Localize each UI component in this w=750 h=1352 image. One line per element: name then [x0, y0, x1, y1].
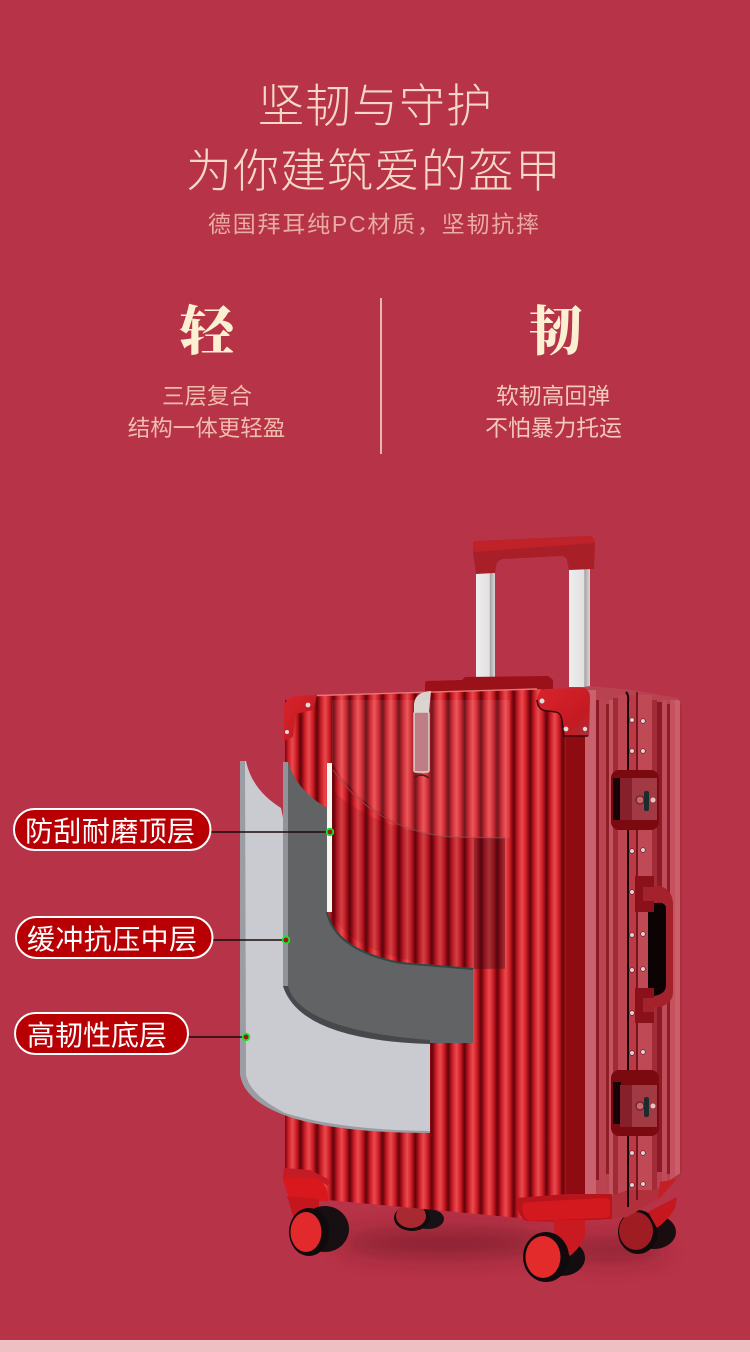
text: tough description: 软韧高回弹 — [496, 383, 610, 409]
layer: buffer middle — [283, 762, 473, 1044]
feature: tough — [485, 302, 622, 441]
callout: bottom layer: 高韧性底层 — [27, 1020, 167, 1051]
feature: light — [128, 302, 285, 441]
latch — [414, 691, 431, 778]
text: tough description: 不怕暴力托运 — [485, 415, 622, 441]
callout: middle layer: 缓冲抗压中层 — [27, 924, 197, 955]
bottom pale band — [0, 1340, 750, 1352]
suitcase — [283, 536, 682, 1282]
side panel — [565, 686, 682, 1222]
text: tough description — [485, 383, 622, 441]
heading: tough: 韧 — [528, 302, 582, 362]
callout: top layer — [14, 809, 333, 850]
floor shadow — [340, 1229, 665, 1260]
layer diagram — [240, 700, 510, 1133]
telescopic handle — [473, 536, 595, 687]
title: 坚韧与守护 — [258, 80, 492, 132]
side seams — [626, 692, 628, 1207]
top lip — [317, 689, 537, 696]
corner cap: top left — [284, 695, 317, 741]
corner bumper: bottom right — [516, 1194, 612, 1222]
lock: upper — [611, 770, 659, 830]
top carry handle — [425, 676, 553, 696]
callout: middle layer — [16, 917, 289, 958]
wheel: front left — [287, 1196, 349, 1256]
overlay: translucent top layer on shell — [332, 700, 510, 969]
rear wheels — [394, 1197, 677, 1254]
wheel: front right — [523, 1220, 585, 1282]
shaded front corner strip — [566, 736, 585, 1196]
text: light description: 三层复合 — [162, 384, 252, 409]
layer: high-toughness base — [240, 761, 430, 1133]
subtitle: 德国拜耳纯PC材质，坚韧抗摔 — [208, 211, 539, 237]
text: light description: 结构一体更轻盈 — [128, 416, 285, 441]
heading: light: 轻 — [179, 302, 237, 362]
lock: lower — [611, 1070, 659, 1136]
front panel with ribs — [283, 688, 612, 1222]
callout: bottom layer — [15, 1013, 249, 1054]
divider — [380, 298, 382, 454]
corner cap: top right — [537, 688, 590, 737]
vertical ribs — [285, 689, 566, 1218]
corner bumper: bottom left — [283, 1168, 330, 1201]
side bottom bumper — [610, 1172, 682, 1219]
front wheels — [287, 1196, 585, 1282]
side carry handle — [635, 876, 673, 1023]
side grooves — [585, 690, 682, 1222]
title: 为你建筑爱的盔甲 — [186, 145, 561, 197]
callout: top layer: 防刮耐磨顶层 — [25, 816, 195, 847]
text: light description — [128, 384, 285, 441]
title — [186, 80, 561, 197]
layer: wear-resistant top — [327, 763, 332, 912]
rivets — [630, 718, 645, 1187]
